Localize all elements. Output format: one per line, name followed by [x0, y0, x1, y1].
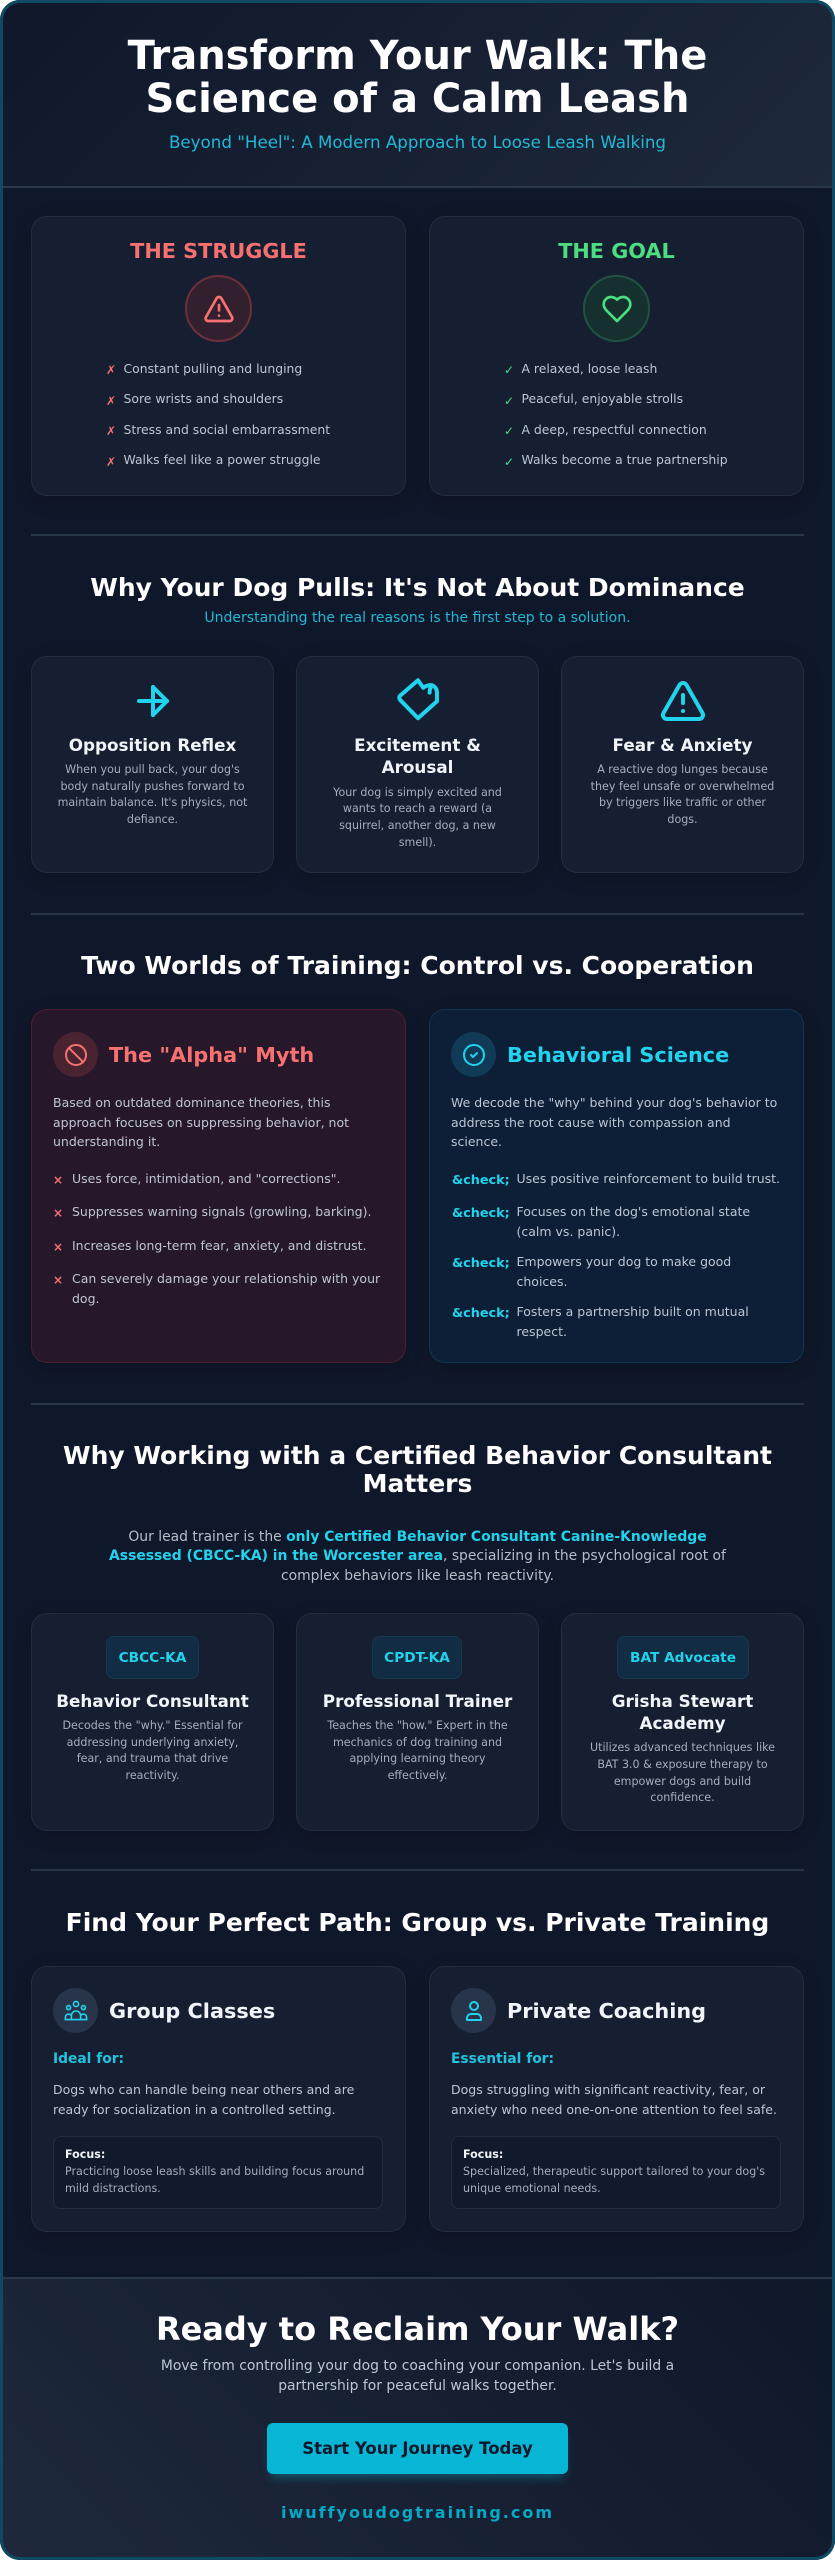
card text: empower dogs and build — [614, 1774, 751, 1788]
heading: two worlds of training: Two Worlds of Training: Control vs. Cooperation — [81, 951, 754, 980]
private description: Dogs struggling with significant reactivity, fear, or — [451, 2082, 765, 2097]
focus box: mild distractions. — [65, 2182, 161, 2194]
header — [0, 0, 835, 188]
focus box: unique emotional needs. — [463, 2182, 601, 2194]
website: iwuffyoudogtraining.com — [281, 2502, 554, 2522]
card text: dogs. — [667, 813, 698, 826]
focus box — [53, 2136, 383, 2209]
panel: behavioral science — [429, 1009, 804, 1363]
group description — [53, 2082, 354, 2116]
panel: fear and anxiety — [561, 656, 804, 873]
panel: the goal — [429, 216, 804, 496]
science list: Uses positive reinforcement to build trust. — [516, 1171, 780, 1186]
goal list: A deep, respectful connection — [522, 422, 707, 437]
panel: alpha myth: × — [53, 1173, 63, 1187]
badge — [106, 1636, 199, 1679]
icon: ban — [53, 1032, 98, 1077]
footer text — [161, 2358, 674, 2394]
icon: tag — [397, 678, 439, 720]
card title — [354, 735, 481, 777]
subtitle: Beyond "Heel": A Modern Approach to Loose Leash Walking — [169, 132, 666, 152]
card text — [62, 1719, 243, 1782]
card text — [327, 1719, 508, 1782]
panel: private coaching — [429, 1966, 804, 2232]
intro paragraph: complex behaviors like leash reactivity. — [281, 1568, 554, 1584]
footer call to action — [0, 2277, 835, 2560]
card text: fear, and trauma that drive — [77, 1752, 228, 1765]
panel: the goal: ✓ — [504, 363, 514, 377]
struggle list: Sore wrists and shoulders — [124, 391, 283, 406]
card title: Behavior Consultant — [56, 1691, 249, 1711]
focus box: Specialized, therapeutic support tailored to your dog's — [463, 2165, 765, 2178]
science list: choices. — [516, 1274, 567, 1289]
alpha heading: The "Alpha" Myth — [109, 1043, 314, 1067]
icon: arrow — [137, 684, 170, 718]
panel: behavioral science: &check; — [452, 1256, 510, 1271]
card text: wants to reach a reward (a — [343, 802, 492, 815]
panel: the goal: ✓ — [504, 455, 514, 469]
panel: BAT advocate — [561, 1613, 804, 1831]
icon: warning triangle — [660, 681, 705, 721]
focus box: Practicing loose leash skills and building focus around — [65, 2165, 364, 2178]
essential for label: Essential for: — [451, 2051, 554, 2067]
card text: they feel unsafe or overwhelmed — [591, 780, 774, 792]
card title: Professional Trainer — [323, 1691, 512, 1711]
icon: group — [53, 1988, 98, 2033]
card text — [58, 763, 248, 826]
goal list: A relaxed, loose leash — [522, 361, 657, 376]
science description: We decode the "why" behind your dog's behavior to — [451, 1095, 777, 1110]
focus box — [451, 2136, 781, 2209]
card text: maintain balance. It's physics, not — [58, 796, 247, 809]
alpha description: approach focuses on suppressing behavior, not — [53, 1114, 349, 1130]
heading: certified behavior consultant — [63, 1441, 772, 1498]
panel: behavioral science: &check; — [452, 1206, 510, 1221]
badge: CPDT-KA — [384, 1650, 450, 1666]
panel: alpha myth — [31, 1009, 406, 1363]
struggle heading: THE STRUGGLE — [130, 239, 307, 263]
private description: anxiety who need one-on-one attention to feel safe. — [451, 2102, 777, 2116]
panel: excitement and arousal — [296, 656, 539, 873]
card text: Teaches the "how." Expert in the — [327, 1719, 508, 1732]
card text: effectively. — [388, 1769, 447, 1782]
icon: person — [451, 1988, 496, 2033]
card text — [590, 1741, 775, 1804]
card text: When you pull back, your dog's — [65, 763, 240, 776]
panel: the struggle: ✗ — [106, 394, 116, 408]
science description: address the root cause with compassion and — [451, 1114, 731, 1130]
panel: group classes — [31, 1966, 406, 2232]
alpha description — [53, 1095, 349, 1149]
focus box: Focus: — [463, 2148, 503, 2161]
science description: science. — [451, 1134, 502, 1149]
alpha list: Uses force, intimidation, and "corrections". — [72, 1171, 340, 1186]
panel: the struggle: ✗ — [106, 424, 116, 438]
intro paragraph: Assessed (CBCC-KA) in the Worcester area, specializing in the psychological root of — [109, 1548, 726, 1564]
badge: CBCC-KA — [119, 1650, 186, 1666]
title: Transform Your Walk: The — [128, 33, 707, 79]
goal list — [504, 361, 728, 469]
card text: body naturally pushes forward to — [60, 780, 244, 792]
card text: Your dog is simply excited and — [333, 786, 502, 798]
science heading: Behavioral Science — [507, 1043, 729, 1067]
intro paragraph: Our lead trainer is the only Certified Behavior Consultant Canine-Knowledge — [128, 1529, 707, 1545]
panel: behavioral science: &check; — [452, 1306, 510, 1321]
struggle list: Constant pulling and lunging — [124, 361, 302, 376]
card text: defiance. — [127, 813, 178, 826]
goal list: Peaceful, enjoyable strolls — [522, 391, 683, 406]
card text: BAT 3.0 & exposure therapy to — [597, 1758, 768, 1771]
heading: certified behavior consultant: Matters — [363, 1469, 472, 1498]
panel: alpha myth: × — [53, 1273, 63, 1287]
struggle list: Walks feel like a power struggle — [124, 452, 321, 467]
alpha list: Can severely damage your relationship with your — [72, 1271, 380, 1286]
card text: confidence. — [650, 1791, 715, 1804]
icon: heart — [583, 275, 650, 342]
science list: Empowers your dog to make good — [516, 1254, 731, 1269]
struggle list: Stress and social embarrassment — [124, 422, 330, 437]
private description — [451, 2082, 777, 2116]
badge: BAT Advocate — [630, 1650, 736, 1666]
heading: why your dog pulls: Why Your Dog Pulls: It's Not About Dominance — [90, 573, 745, 602]
panel: the goal: ✓ — [504, 424, 514, 438]
alpha description: Based on outdated dominance theories, this — [53, 1095, 330, 1110]
alpha list: Suppresses warning signals (growling, barking). — [72, 1204, 371, 1219]
group description: Dogs who can handle being near others and are — [53, 2082, 354, 2097]
goal heading: THE GOAL — [558, 239, 675, 263]
heading: find your perfect path: Find Your Perfect Path: Group vs. Private Training — [66, 1908, 769, 1937]
card title: Academy — [639, 1713, 726, 1733]
button — [267, 2423, 568, 2474]
footer text: partnership for peaceful walks together. — [278, 2378, 557, 2394]
alpha description: understanding it. — [53, 1134, 160, 1149]
icon: warning triangle — [185, 275, 252, 342]
science list: (calm vs. panic). — [516, 1224, 620, 1239]
alpha list — [53, 1171, 380, 1306]
card title: Excitement & — [354, 735, 481, 755]
alpha list: Increases long-term fear, anxiety, and distrust. — [72, 1238, 367, 1253]
card title: Opposition Reflex — [69, 735, 236, 755]
private heading: Private Coaching — [507, 1999, 706, 2023]
card text — [590, 763, 774, 826]
goal list: Walks become a true partnership — [522, 452, 728, 467]
card text: mechanics of dog training and — [333, 1736, 502, 1748]
science list — [452, 1171, 780, 1339]
title — [128, 33, 707, 122]
card text — [333, 786, 502, 849]
panel: behavioral science: &check; — [452, 1173, 510, 1188]
panel: opposition reflex — [31, 656, 274, 873]
card title: Arousal — [382, 757, 453, 777]
footer text: Move from controlling your dog to coaching your companion. Let's build a — [161, 2358, 674, 2374]
panel: the struggle — [31, 216, 406, 496]
science list: respect. — [516, 1324, 567, 1339]
panel: CBCC-KA — [31, 1613, 274, 1831]
science description — [451, 1095, 777, 1149]
title: Science of a Calm Leash — [146, 76, 689, 122]
panel: the goal: ✓ — [504, 394, 514, 408]
science list: Fosters a partnership built on mutual — [516, 1304, 749, 1319]
panel: alpha myth: × — [53, 1240, 63, 1254]
focus box: Focus: — [65, 2148, 105, 2161]
card text: Utilizes advanced techniques like — [590, 1741, 775, 1754]
group heading: Group Classes — [109, 1999, 275, 2023]
heading: certified behavior consultant: Why Working with a Certified Behavior Consultant — [63, 1441, 772, 1470]
card text: by triggers like traffic or other — [599, 796, 766, 809]
card text: Decodes the "why." Essential for — [62, 1719, 243, 1732]
card title: Fear & Anxiety — [613, 735, 752, 755]
badge — [372, 1636, 462, 1679]
intro paragraph — [109, 1529, 726, 1584]
card text: addressing underlying anxiety, — [67, 1736, 238, 1748]
ideal for label: Ideal for: — [53, 2051, 124, 2067]
subheading: why your dog pulls: Understanding the real reasons is the first step to a solution. — [204, 610, 631, 626]
card title — [612, 1691, 753, 1733]
panel: alpha myth: × — [53, 1206, 63, 1220]
card text: A reactive dog lunges because — [597, 763, 768, 776]
alpha list: dog. — [72, 1291, 100, 1306]
struggle list — [106, 361, 330, 469]
panel: the struggle: ✗ — [106, 363, 116, 377]
card text: reactivity. — [126, 1769, 179, 1782]
card text: smell). — [399, 836, 436, 849]
group description: ready for socialization in a controlled setting. — [53, 2102, 336, 2116]
badge — [617, 1636, 749, 1679]
card title: Grisha Stewart — [612, 1691, 753, 1711]
card text: squirrel, another dog, a new — [339, 819, 496, 832]
panel: CPDT-KA — [296, 1613, 539, 1831]
panel: the struggle: ✗ — [106, 455, 116, 469]
card text: applying learning theory — [349, 1752, 486, 1765]
footer heading: Ready to Reclaim Your Walk? — [156, 2310, 679, 2348]
science list: Focuses on the dog's emotional state — [516, 1204, 750, 1219]
button: Start Your Journey Today — [302, 2439, 533, 2458]
icon: check circle — [451, 1032, 496, 1077]
